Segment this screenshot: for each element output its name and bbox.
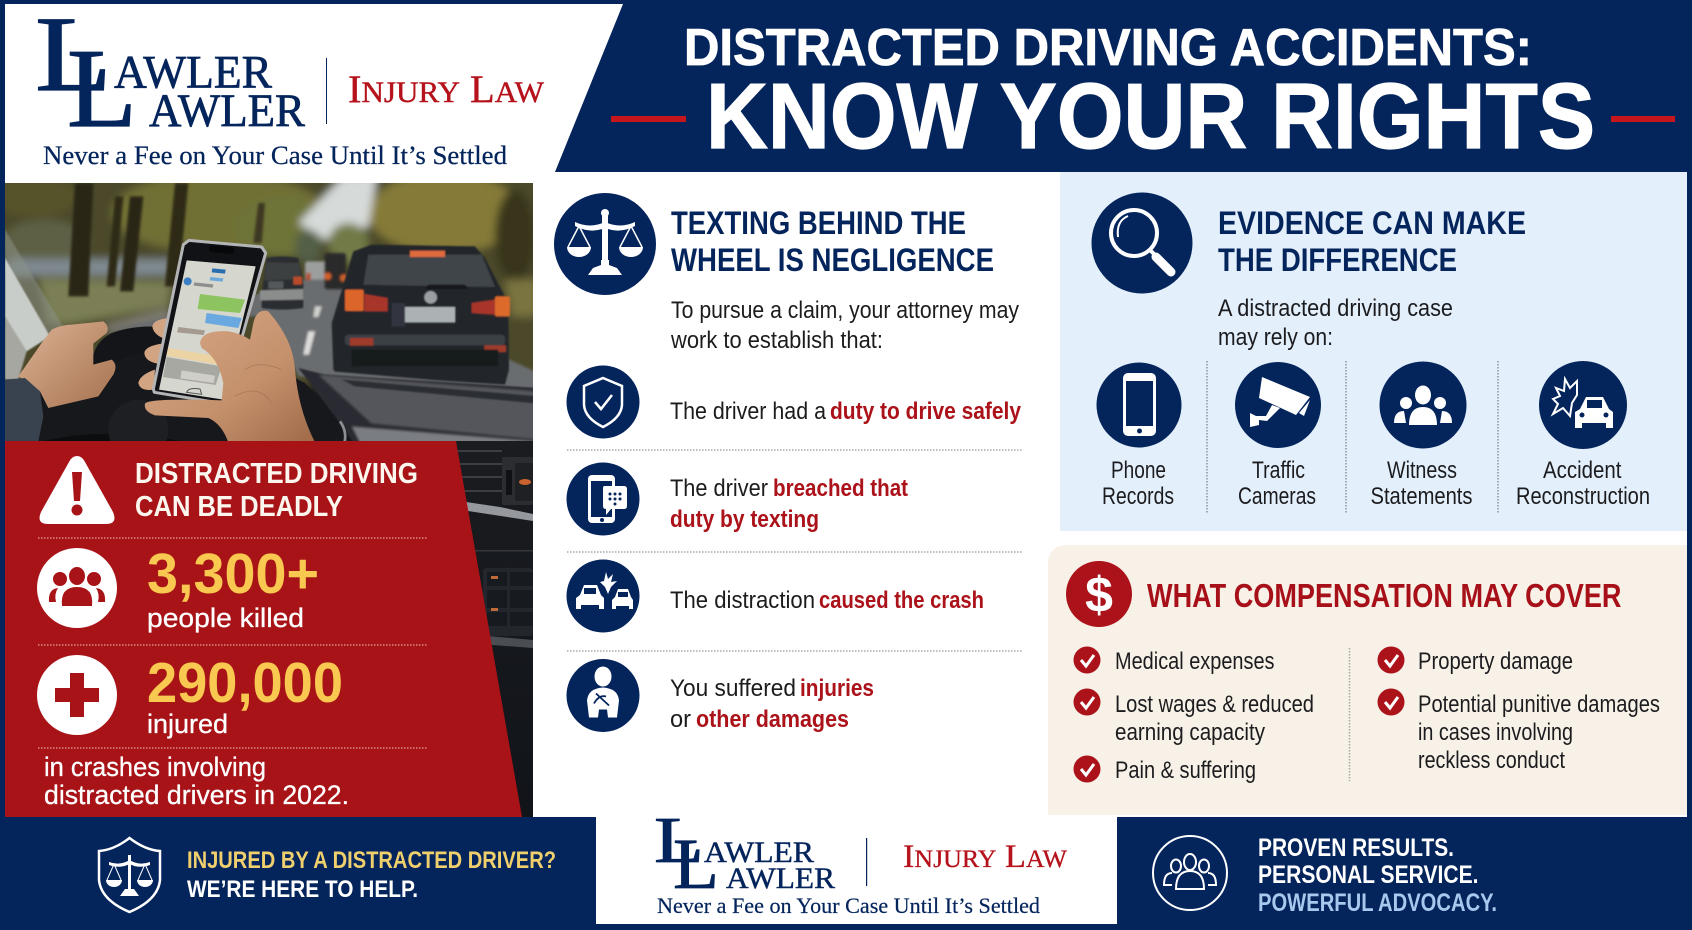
title banner	[611, 19, 1675, 168]
heading: THE DIFFERENCE	[1218, 242, 1457, 278]
evidence: accident reconstruction: Reconstruction	[1516, 483, 1650, 510]
icon: people outline	[1153, 836, 1227, 910]
row: damages: You suffered	[670, 675, 796, 702]
row: breach: breached that	[773, 475, 908, 502]
heading: EVIDENCE CAN MAKE	[1218, 205, 1526, 241]
evidence: witness statements: Witness	[1387, 457, 1457, 484]
intro text	[1218, 295, 1453, 351]
evidence: phone records: Phone	[1111, 457, 1166, 484]
footer: firm values	[1153, 834, 1497, 917]
evidence: phone records: Records	[1102, 483, 1174, 510]
left hand	[18, 321, 115, 408]
footer: firm values: PERSONAL SERVICE.	[1258, 861, 1478, 889]
heading: CAN BE DEADLY	[135, 491, 343, 523]
panel: evidence	[1060, 172, 1687, 531]
windshield pillar	[5, 230, 65, 380]
stat: killed: people killed	[147, 603, 304, 633]
intro text: To pursue a claim, your attorney may	[671, 297, 1019, 324]
row: breach: duty by texting	[670, 506, 819, 533]
heading: WHEEL IS NEGLIGENCE	[671, 242, 994, 278]
footer: logo: AWLER	[726, 862, 835, 895]
icon: injured person	[566, 659, 640, 732]
evidence: traffic cameras	[1235, 362, 1321, 510]
photo: texting while driving	[0, 173, 542, 820]
icon: shield scales	[99, 838, 160, 912]
row: duty: duty to drive safely	[830, 398, 1022, 425]
panel: texting is negligence	[554, 193, 1023, 733]
row: causation	[670, 587, 984, 614]
footnote	[44, 752, 349, 810]
row: damages: injuries	[800, 675, 874, 702]
footer: help message	[99, 838, 556, 912]
title banner: DISTRACTED DRIVING ACCIDENTS:	[684, 19, 1532, 77]
heading: TEXTING BEHIND THE	[671, 205, 966, 241]
evidence: accident reconstruction: Accident	[1543, 457, 1622, 484]
checklist: right column: in cases involving	[1418, 719, 1573, 746]
evidence: accident reconstruction	[1516, 361, 1650, 510]
evidence: witness statements: Statements	[1370, 483, 1472, 510]
checklist: left column: Medical expenses	[1115, 648, 1274, 675]
panel: distracted driving statistics	[5, 441, 522, 817]
checklist: left column: Lost wages & reduced	[1115, 691, 1314, 718]
row: damages: other damages	[696, 706, 849, 733]
fingers behind phone	[138, 318, 168, 390]
heading: DISTRACTED DRIVING	[135, 458, 418, 490]
icon: scales	[554, 193, 656, 295]
blurred scenery	[0, 173, 542, 386]
intro text: may rely on:	[1218, 324, 1333, 351]
icon: warning	[40, 456, 114, 524]
row: damages	[670, 675, 874, 733]
icon: people killed	[37, 548, 117, 628]
evidence: traffic cameras: Cameras	[1238, 483, 1316, 510]
heading	[135, 458, 418, 523]
footer: logo: INJURY LAW	[903, 839, 1067, 875]
row: duty	[670, 398, 1022, 425]
checklist: left column	[1074, 646, 1314, 784]
evidence: phone records	[1096, 362, 1182, 510]
stat: killed: 3,300+	[147, 542, 319, 606]
checklist: left column: earning capacity	[1115, 719, 1265, 746]
logo: Lawler Lawler: L	[67, 27, 137, 151]
footer: help message: WE’RE HERE TO HELP.	[187, 876, 418, 903]
title banner: KNOW YOUR RIGHTS	[706, 64, 1595, 168]
footer: logo: L	[673, 824, 719, 904]
icon: phone chat	[566, 462, 640, 536]
footnote: in crashes involving	[44, 752, 266, 782]
heading	[671, 205, 994, 278]
sleeve	[5, 378, 43, 441]
footer: logo: Never a Fee on Your Case Until It’s Settled	[657, 893, 1040, 918]
row: duty: The driver had a	[670, 398, 827, 425]
intro text	[670, 297, 1019, 354]
dashboard	[298, 368, 533, 441]
row: causation: The distraction	[670, 587, 815, 614]
row: breach: The driver	[670, 475, 768, 502]
stat: injured: 290,000	[147, 651, 343, 715]
icon: shield check	[566, 366, 640, 438]
cabin interior and steering wheel	[103, 338, 312, 390]
evidence: witness statements	[1370, 362, 1472, 510]
intro text: A distracted driving case	[1218, 295, 1453, 322]
logo: Lawler Lawler: AWLER	[149, 85, 306, 137]
footer: logo: AWLER	[704, 836, 814, 869]
icon: dollar: $	[1085, 567, 1113, 623]
footer: help message: INJURED BY A DISTRACTED DRIVER?	[187, 847, 556, 874]
intro text: work to establish that:	[670, 327, 883, 354]
stat: injured: injured	[147, 709, 228, 739]
panel: compensation	[1048, 545, 1687, 815]
phone held in hand	[153, 240, 266, 404]
logo: Lawler Lawler: AWLER	[114, 46, 273, 98]
checklist: right column	[1378, 646, 1660, 774]
right hand on phone	[145, 311, 315, 442]
car ahead	[260, 256, 303, 310]
icon: magnifier	[1092, 192, 1192, 294]
footer: logo: L	[654, 804, 704, 877]
footnote: distracted drivers in 2022.	[44, 780, 349, 810]
checklist: right column: Property damage	[1418, 648, 1573, 675]
stat: killed	[147, 542, 319, 633]
footer: firm values: POWERFUL ADVOCACY.	[1258, 889, 1497, 917]
dashboard centre stack	[456, 441, 533, 648]
lead SUV	[332, 245, 510, 385]
icon: car crash	[566, 560, 640, 632]
row: breach	[670, 475, 908, 533]
row: damages: or	[670, 706, 691, 733]
panel: white content area	[533, 172, 1687, 817]
checklist: left column: Pain & suffering	[1115, 757, 1256, 784]
logo: Lawler Lawler	[35, 0, 327, 151]
evidence: traffic cameras: Traffic	[1252, 457, 1305, 484]
footer: logo	[596, 804, 1117, 924]
icon: medical cross	[37, 655, 117, 735]
icon: dollar	[1066, 561, 1132, 627]
footer: firm values: PROVEN RESULTS.	[1258, 834, 1454, 862]
checklist: right column: reckless conduct	[1418, 747, 1565, 774]
row: causation: caused the crash	[819, 587, 984, 614]
heading	[1218, 205, 1526, 278]
logo: injury law: INJURY LAW	[348, 68, 545, 111]
tagline: Never a Fee on Your Case Until It’s Settled	[43, 141, 507, 170]
panel: logo header	[5, 0, 623, 183]
